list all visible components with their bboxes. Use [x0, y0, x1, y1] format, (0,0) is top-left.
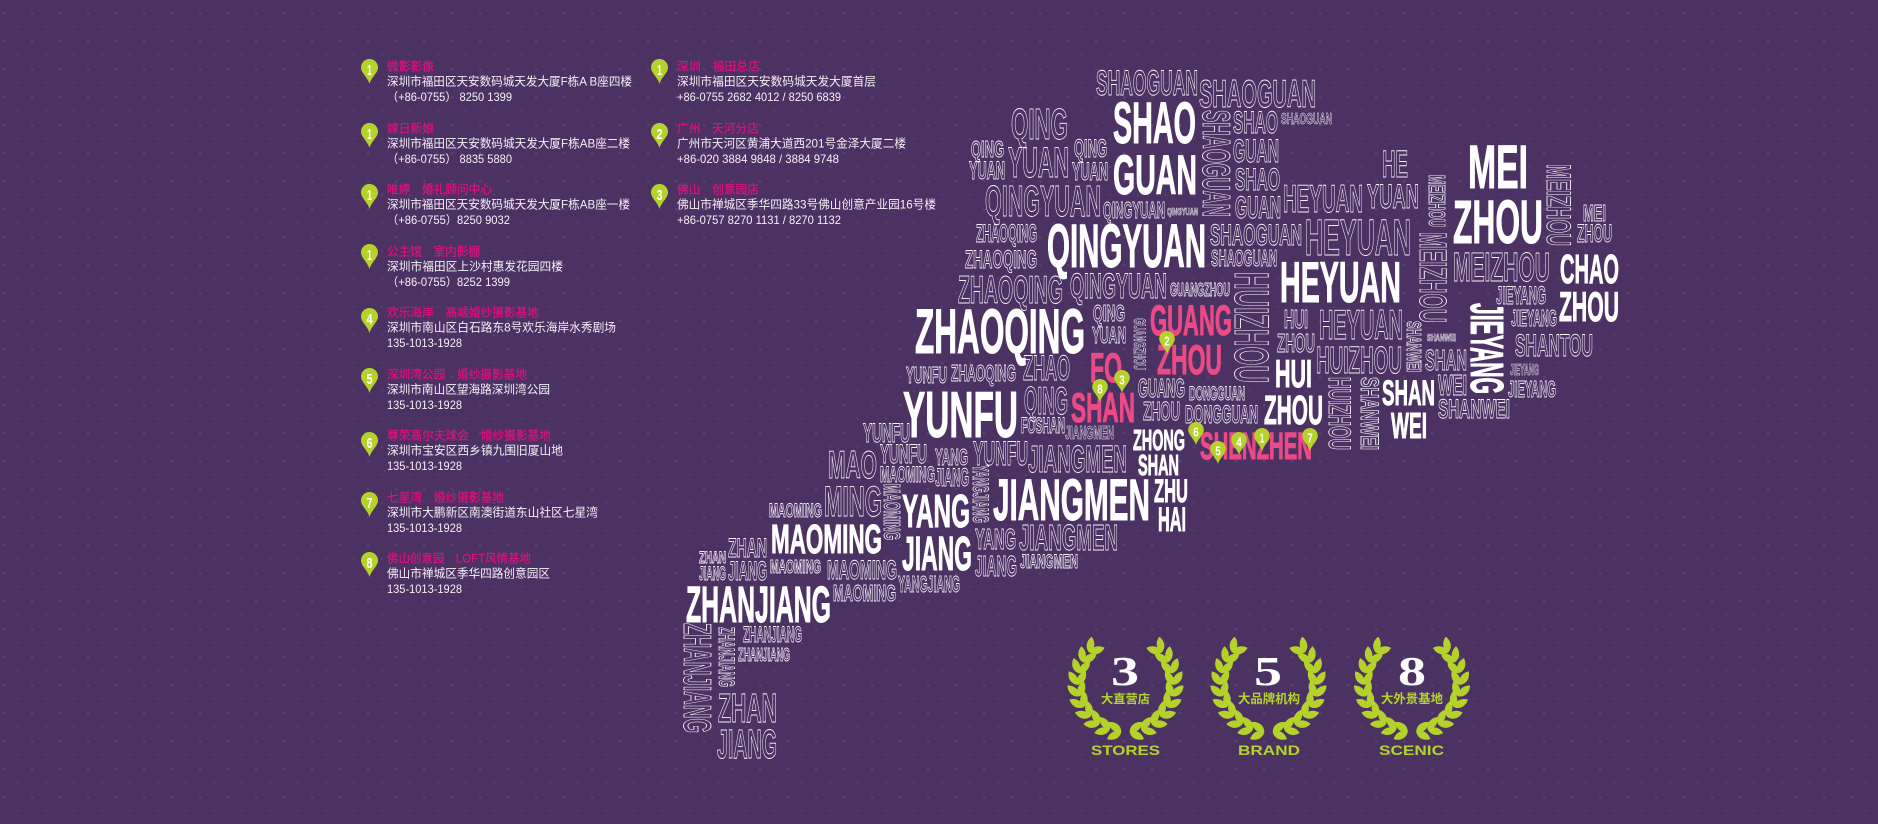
pin 1 Shenzhen: [1254, 428, 1270, 451]
city words: Maoming: MAOMING: [771, 516, 882, 562]
chart: word-cloud map of Guangdong cities: [675, 64, 1619, 767]
city words: Shaoguan: SHAO: [1113, 91, 1196, 156]
location 7: 尊荣高尔夫球会: 尊荣高尔夫球会 婚纱摄影基地: [387, 428, 551, 442]
location 4: 公主馆 室内影棚: [361, 244, 563, 289]
city words: Shaoguan: SHAOGUAN: [1281, 111, 1332, 128]
city words: Heyuan: HE: [1382, 144, 1408, 186]
city words: Zhaoqing: ZHAO: [1023, 349, 1070, 388]
city words: Jieyang and Shantou: JIEYANG: [1510, 362, 1539, 379]
city words: Zhuhai: ZHU: [1154, 473, 1188, 509]
pin 3 Foshan: [1114, 370, 1130, 393]
location 8: 七星湾: 七星湾 婚纱摄影基地: [387, 490, 504, 504]
city words: Zhanjiang: JIANG: [717, 721, 777, 767]
badge: 3 stores: [1064, 633, 1187, 758]
location 5: 欢乐海岸: 深圳市南山区白石路东8号欢乐海岸水秀剧场: [387, 320, 616, 334]
city words: Foshan: FOSHAN: [1021, 413, 1065, 438]
city words: Jieyang and Shantou: JIEYANG: [1461, 303, 1513, 394]
city words: Qingyuan: QINGYUAN: [985, 177, 1101, 226]
text: CHAO: [1560, 246, 1619, 292]
city words: Dongguan: DONGGUAN: [1189, 383, 1245, 405]
city words: Guangzhou: ZHOU: [1143, 396, 1180, 426]
city words: Qingyuan: QING: [1011, 100, 1068, 149]
city words: Shanwei: SHANWEI: [1355, 377, 1382, 450]
city words: Yangjiang: JIANG: [935, 465, 969, 492]
city words: Jieyang and Shantou: JIEYANG: [1511, 305, 1557, 331]
location 3: 唯婷 婚礼顾问中心: （+86-0755）8250 9032: [387, 213, 510, 227]
store 1: 深圳 福田总店: 1: [657, 62, 662, 79]
location 8: 七星湾: [361, 490, 598, 535]
city words: Zhanjiang: JIANG: [728, 556, 767, 586]
icons: numbered map pins: [1092, 331, 1318, 464]
chart: word-cloud map of Guangdong cities: ZHANJIANG: [686, 576, 831, 633]
city words: Heyuan: HEYUAN: [1283, 178, 1363, 221]
badge: 8 scenic bases: 大外景基地: [1381, 691, 1444, 706]
city words: Qingyuan: YUAN: [1092, 322, 1126, 348]
location 9: 佛山创意园: 135-1013-1928: [387, 583, 462, 596]
location 2: 嫁日新娘: 嫁日新娘: [387, 122, 434, 136]
location 6: 深圳湾公园: 深圳市南山区望海路深圳湾公园: [387, 382, 550, 396]
city words: Foshan: [1021, 345, 1135, 438]
city words: Qingyuan: YUAN: [1072, 159, 1108, 186]
pin 7 Shenzhen: [1302, 428, 1318, 451]
city words: Zhuhai: [1154, 473, 1188, 539]
location 7: 尊荣高尔夫球会: [361, 428, 563, 473]
city words: Zhanjiang: ZHAN: [728, 533, 767, 563]
location 7: 尊荣高尔夫球会: 深圳市宝安区西乡镇九围旧厦山地: [387, 444, 563, 458]
city words: Qingyuan: QING: [1093, 300, 1125, 326]
city words: Zhanjiang: [675, 533, 831, 767]
city words: Meizhou: MEIZHOU: [1424, 175, 1450, 227]
badge: 8 scenic bases: SCENIC: [1379, 742, 1444, 758]
city words: Maoming: MAOMING: [827, 555, 897, 585]
city words: Zhaoqing: ZHAOQING: [951, 360, 1016, 386]
location 9: 佛山创意园: 佛山创意园 LOFT风情基地: [387, 552, 531, 566]
pin 7 Shenzhen: 7: [1307, 430, 1313, 445]
location 1: 微影影像: 深圳市福田区天安数码城天发大厦F栋A B座四楼: [387, 74, 632, 88]
city words: Maoming: [769, 444, 935, 606]
pin 4 Shenzhen: [1231, 432, 1247, 455]
city words: Huizhou: ZHOU: [1277, 328, 1315, 358]
location 6: 深圳湾公园: [361, 368, 550, 412]
city words: Zhongshan: SHAN: [1138, 450, 1179, 482]
store 3: 佛山 创意园店: 佛山 创意园店: [677, 182, 759, 196]
city words: Maoming: MAOMING: [769, 500, 822, 522]
city words: Jiangmen: JIANGMEN: [1020, 551, 1078, 573]
location 4: 公主馆 室内影棚: （+86-0755）8252 1399: [387, 275, 510, 289]
store 2: 广州 天河分店: +86-020 3884 9848 / 3884 9748: [677, 153, 839, 166]
city words: Huizhou: HUI: [1284, 304, 1308, 334]
city words: Guangzhou: GUANGZHOU: [1170, 280, 1230, 300]
city words: Shaoguan: [1096, 64, 1332, 271]
city words: Yangjiang: YANGJIANG: [968, 465, 993, 523]
city words: Jiangmen: JIANGMEN: [993, 468, 1150, 533]
city words: Qingyuan: YUAN: [1008, 139, 1069, 187]
city words: Zhaoqing: [915, 221, 1085, 388]
city words: Shanwei: SHAN: [1382, 374, 1435, 413]
location 4: 公主馆 室内影棚: 1: [367, 247, 372, 264]
city words: Meizhou: [1411, 133, 1612, 323]
city words: Foshan: SHAN: [1071, 385, 1135, 431]
city words: Dongguan: [1185, 383, 1258, 429]
city words: Zhuhai: HAI: [1158, 501, 1186, 539]
badge: 8 scenic bases: 8: [1398, 648, 1426, 694]
city words: Guangzhou: GUANGZHOU: [1130, 318, 1149, 370]
city words: Meizhou: MEIZHOU: [1411, 232, 1453, 323]
location 9: 佛山创意园: [361, 552, 550, 596]
city words: Jiangmen: [993, 423, 1150, 573]
location 2: 嫁日新娘: 深圳市福田区天安数码城天发大厦F栋AB座二楼: [387, 136, 630, 150]
city words: Yunfu: YUNFU: [906, 362, 947, 388]
city words: Heyuan: YUAN: [1367, 178, 1419, 216]
chart: word-cloud map of Guangdong cities: MAOMING: [880, 462, 935, 487]
city words: Jiangmen: JIANGMEN: [1019, 517, 1118, 558]
location 1: 微影影像: 微影影像: [387, 60, 434, 74]
chart: word-cloud map of Guangdong cities: ZHOU: [1577, 221, 1612, 248]
location 8: 七星湾: 7: [366, 495, 372, 512]
city words: Shanwei: WEI: [1438, 370, 1467, 402]
city word: Shenzhen: SHENZHEN: [1200, 426, 1312, 468]
city words: Heyuan: HEYUAN: [1280, 251, 1401, 315]
city words: Shaoguan: SHAOGUAN: [1211, 245, 1277, 271]
city words: Guangzhou: GUANG: [1150, 297, 1232, 345]
panel: location list, first column: [361, 59, 632, 596]
location 5: 欢乐海岸: 135-1013-1928: [387, 337, 462, 350]
store 1: 深圳 福田总店: 深圳市福田区天安数码城天发大厦首层: [677, 74, 876, 88]
badge: 5 brands: [1207, 633, 1330, 758]
pin 4 Shenzhen: 4: [1236, 434, 1242, 449]
badge: 5 brands: 大品牌机构: [1238, 691, 1300, 706]
city words: Jiangmen: JIANGMEN: [1065, 423, 1114, 443]
city words: Meizhou: MEIZHOU: [1539, 164, 1577, 246]
city words: Foshan: FO: [1090, 345, 1122, 391]
pin 8 Foshan: [1092, 379, 1108, 402]
city words: Qingyuan: [969, 100, 1206, 348]
location 5: 欢乐海岸: 4: [366, 311, 373, 328]
location 2: 嫁日新娘: [361, 122, 630, 166]
location 5: 欢乐海岸: [361, 306, 616, 350]
city words: Yangjiang: YANGJIANG: [898, 571, 960, 597]
badge: 3 stores: 大直营店: [1101, 691, 1150, 706]
badge: 5 brands: 5: [1254, 648, 1282, 694]
location 9: 佛山创意园: 8: [366, 555, 372, 572]
city words: Shanwei: WEI: [1391, 405, 1427, 446]
city words: Zhanjiang: ZHANJIANG: [743, 622, 802, 647]
badge: 3 stores: STORES: [1091, 742, 1160, 758]
location 6: 深圳湾公园: 135-1013-1928: [387, 399, 462, 412]
city words: Shanwei: SHANWEI: [1402, 321, 1425, 372]
city words: Zhanjiang: ZHANJIANG: [714, 627, 739, 687]
chart: word-cloud map of Guangdong cities: QINGYUAN: [1047, 212, 1206, 280]
city words: Huizhou: HUI: [1275, 353, 1312, 396]
location 1: 微影影像: （+86-0755） 8250 1399: [387, 90, 512, 104]
city words: Yangjiang: YANG: [975, 524, 1016, 556]
city words: Zhanjiang: ZHANJIANG: [738, 645, 790, 665]
city words: Huizhou: ZHOU: [1264, 387, 1323, 433]
location 7: 尊荣高尔夫球会: 135-1013-1928: [387, 460, 462, 473]
pin 1 Shenzhen: 1: [1260, 430, 1264, 445]
store 3: 佛山 创意园店: 3: [656, 187, 662, 204]
city words: Heyuan: HEYUAN: [1305, 209, 1411, 266]
city words: Zhanjiang: JIANG: [699, 563, 726, 585]
store 2: 广州 天河分店: 广州 天河分店: [677, 122, 759, 136]
pin 6 Shenzhen: 6: [1193, 424, 1199, 439]
location 8: 七星湾: 135-1013-1928: [387, 522, 462, 535]
city words: Qingyuan: QING: [971, 136, 1004, 162]
city words: Heyuan: HEYUAN: [1319, 302, 1403, 348]
pin 3 Foshan: 3: [1119, 372, 1125, 387]
location 8: 七星湾: 深圳市大鹏新区南澳街道东山社区七星湾: [387, 506, 598, 520]
city words: Shaoguan: SHAO: [1235, 161, 1280, 197]
location 3: 唯婷 婚礼顾问中心: [361, 182, 630, 227]
location 5: 欢乐海岸: 欢乐海岸 高端婚纱摄影基地: [387, 306, 539, 320]
store 3: 佛山 创意园店: 佛山市禅城区季华四路33号佛山创意产业园16号楼: [677, 198, 936, 212]
city words: Shaoguan: SHAOGUAN: [1199, 73, 1316, 116]
city words: Maoming: MAOMING: [879, 484, 905, 540]
location 1: 微影影像: [361, 59, 632, 104]
location 9: 佛山创意园: 佛山市禅城区季华四路创意园区: [387, 566, 550, 580]
city words: Guangzhou: ZHOU: [1157, 337, 1222, 383]
store 2: 广州 天河分店: [651, 122, 906, 166]
city words: Zhanjiang: ZHAN: [718, 685, 777, 731]
store 1: 深圳 福田总店: [651, 59, 876, 104]
city words: Shanwei: SHAN: [1425, 345, 1467, 377]
city words: Zhongshan: ZHONG: [1133, 425, 1185, 457]
location 3: 唯婷 婚礼顾问中心: 唯婷 婚礼顾问中心: [387, 182, 492, 196]
location 2: 嫁日新娘: （+86-0755） 8835 5880: [387, 152, 512, 166]
city words: Yunfu: YUNFU: [903, 378, 1018, 451]
city words: Meizhou: MEI: [1468, 133, 1528, 201]
city words: Maoming: MING: [824, 478, 882, 526]
store 1: 深圳 福田总店: +86-0755 2682 4012 / 8250 6839: [677, 91, 841, 104]
city words: Zhaoqing: ZHAOQING: [915, 297, 1085, 367]
location 3: 唯婷 婚礼顾问中心: 1: [367, 187, 372, 204]
city words: Qingyuan: QINGYUAN: [1167, 207, 1198, 218]
city words: Jiangmen: JIANGMEN: [1028, 439, 1127, 481]
store 3: 佛山 创意园店: [651, 182, 936, 227]
city words: Jieyang and Shantou: SHANTOU: [1515, 327, 1593, 363]
city words: Foshan: QING: [1024, 380, 1068, 423]
city words: Guangzhou: GUANG: [1138, 373, 1185, 403]
city words: Shaoguan: GUAN: [1233, 133, 1279, 169]
city words: Zhaoqing: ZHAOQING: [976, 221, 1037, 248]
city words: Shaoguan: SHAOGUAN: [1210, 219, 1302, 252]
city words: Jieyang and Shantou: JIEYANG: [1496, 283, 1546, 310]
location 4: 公主馆 室内影棚: 公主馆 室内影棚: [387, 244, 480, 258]
city words: Huizhou: HUIZHOU: [1224, 272, 1278, 383]
location 7: 尊荣高尔夫球会: 6: [366, 435, 372, 452]
city words: Huizhou: [1224, 272, 1402, 450]
city words: Shaoguan: SHAO: [1233, 104, 1278, 140]
chart: word-cloud map of Guangdong cities: DONGGUAN: [1185, 402, 1258, 429]
city words: Shanwei: [1355, 321, 1510, 450]
city words: Yangjiang: JIANG: [902, 527, 972, 581]
city words: Yunfu: [863, 362, 1028, 473]
store 2: 广州 天河分店: 广州市天河区黄浦大道西201号金泽大厦二楼: [677, 136, 906, 150]
pin 5 Shenzhen: 5: [1215, 443, 1221, 458]
pin 2 Guangzhou: 2: [1164, 333, 1170, 348]
city words: Shaoguan: GUAN: [1113, 143, 1197, 206]
badge: 3 stores: 3: [1111, 648, 1139, 694]
city words: Shaoguan: SHAOGUAN: [1096, 64, 1198, 103]
city words: Chaozhou: ZHOU: [1559, 284, 1619, 330]
city words: Qingyuan: YUAN: [969, 158, 1005, 185]
city words: Qingyuan: QINGYUAN: [1070, 267, 1167, 306]
location 3: 唯婷 婚礼顾问中心: 深圳市福田区天安数码城天发大厦F栋AB座一楼: [387, 198, 630, 212]
chart: word-cloud map of Guangdong cities: YUNFU: [973, 435, 1028, 473]
store 1: 深圳 福田总店: 深圳 福田总店: [677, 60, 760, 74]
city words: Shanwei: SHANWEI: [1427, 333, 1456, 344]
pin 6 Shenzhen: [1188, 422, 1204, 445]
city words: Chaozhou: [1559, 246, 1619, 330]
city words: Zhanjiang: ZHAN: [699, 548, 726, 567]
store 2: 广州 天河分店: 2: [656, 126, 662, 143]
city words: Maoming: MAO: [828, 444, 877, 487]
city words: Heyuan: [1280, 144, 1419, 348]
badge: 8 scenic bases: [1350, 633, 1474, 758]
badge: 5 brands: BRAND: [1238, 742, 1300, 758]
city words: Shanwei: SHANWEI: [1438, 394, 1510, 424]
city words: Jieyang and Shantou: [1461, 283, 1593, 402]
city words: Qingyuan: QINGYUAN: [1103, 197, 1165, 223]
chart: word-cloud map of Guangdong cities: HUIZHOU: [1316, 340, 1402, 382]
city words: Meizhou: MEIZHOU: [1453, 244, 1550, 290]
location 1: 微影影像: 1: [367, 62, 372, 79]
location 6: 深圳湾公园: 5: [366, 371, 372, 388]
city words: Meizhou: ZHOU: [1453, 188, 1543, 256]
pin 8 Foshan: 8: [1097, 381, 1103, 396]
city words: Yangjiang: YANG: [935, 444, 968, 470]
city words: Maoming: MAOMING: [833, 580, 896, 606]
city words: Huizhou: HUIZHOU: [1322, 377, 1358, 450]
pin 2 Guangzhou: [1159, 331, 1175, 354]
pin 5 Shenzhen: [1210, 441, 1226, 464]
city words: Shaoguan: GUAN: [1235, 189, 1281, 225]
city words: Guangzhou: [1130, 280, 1232, 426]
panel: location list, second column: [651, 59, 936, 227]
city words: Zhongshan: [1133, 425, 1185, 482]
city words: Zhaoqing: ZHAOQING: [965, 247, 1037, 274]
location 4: 公主馆 室内影棚: 深圳市福田区上沙村惠发花园四楼: [387, 260, 563, 274]
chart: word-cloud map of Guangdong cities: JIANG: [975, 551, 1017, 583]
location 6: 深圳湾公园: 深圳湾公园 婚纱摄影基地: [387, 368, 527, 382]
city words: Zhaoqing: ZHAOQING: [958, 269, 1063, 312]
city words: Yangjiang: [898, 444, 1017, 597]
location 2: 嫁日新娘: 1: [367, 126, 372, 143]
city words: Qingyuan: QING: [1074, 136, 1107, 163]
city words: Meizhou: MEI: [1583, 200, 1606, 226]
store 3: 佛山 创意园店: +86-0757 8270 1131 / 8270 1132: [677, 214, 841, 227]
city words: Yunfu: YUNFU: [863, 418, 910, 448]
city words: Shaoguan: SHAOGUAN: [1194, 110, 1237, 217]
city words: Jieyang and Shantou: JIEYANG: [1508, 376, 1556, 402]
city words: Maoming: MAOMING: [770, 557, 821, 577]
city words: Yunfu: YUNFU: [880, 439, 927, 469]
city words: Yangjiang: YANG: [902, 485, 970, 537]
